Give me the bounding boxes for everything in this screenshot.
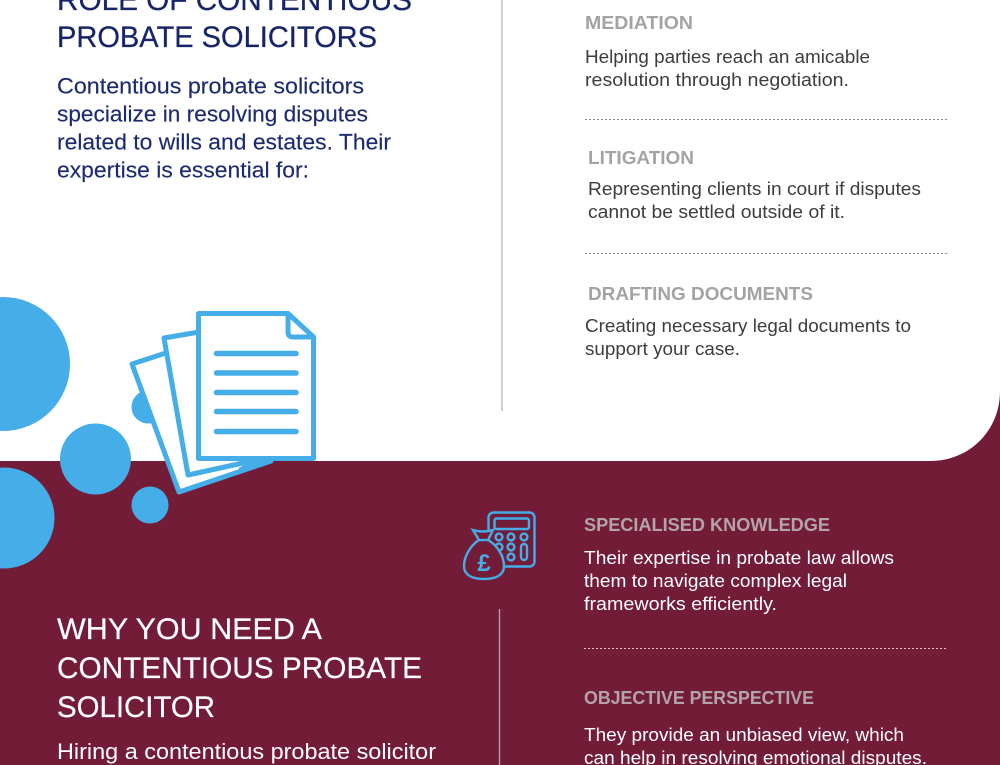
text block: role introduction: related to wills and estates. Their bbox=[57, 130, 392, 154]
heading: why you need a contentious probate solicitor: CONTENTIOUS PROBATE bbox=[57, 652, 422, 685]
icon: calculator and money bag: £ bbox=[477, 550, 491, 577]
item: objective perspective: They provide an unbiased view, which bbox=[584, 724, 904, 745]
panel: white upper section bbox=[0, 0, 1000, 461]
heading: role of contentious probate solicitors: PROBATE SOLICITORS bbox=[57, 21, 377, 54]
icon: calculator and money bag bbox=[464, 512, 534, 579]
item: drafting documents: Creating necessary legal documents to bbox=[585, 315, 911, 336]
item: litigation: Representing clients in court if disputes bbox=[588, 178, 921, 199]
item: mediation bbox=[585, 12, 870, 90]
item: objective perspective bbox=[584, 687, 927, 765]
item: specialised knowledge: SPECIALISED KNOWLEDGE bbox=[584, 514, 830, 535]
item: litigation bbox=[588, 147, 921, 222]
item: drafting documents bbox=[585, 283, 911, 359]
text block: role introduction: expertise is essential for: bbox=[57, 158, 309, 182]
item: specialised knowledge: Their expertise in probate law allows bbox=[584, 547, 894, 568]
text block: role introduction: Contentious probate solicitors bbox=[57, 74, 364, 98]
text block: why introduction: Hiring a contentious probate solicitor bbox=[57, 739, 437, 764]
item: mediation: Helping parties reach an amicable bbox=[585, 46, 870, 67]
item: litigation: LITIGATION bbox=[588, 147, 694, 168]
decorative blue circles bbox=[0, 297, 168, 568]
item: specialised knowledge: frameworks efficiently. bbox=[584, 593, 777, 614]
item: drafting documents: DRAFTING DOCUMENTS bbox=[588, 283, 813, 304]
heading: why you need a contentious probate solicitor: SOLICITOR bbox=[57, 691, 215, 724]
item: mediation: resolution through negotiation. bbox=[585, 69, 849, 90]
heading: why you need a contentious probate solicitor bbox=[57, 613, 422, 724]
text block: role introduction bbox=[57, 74, 392, 182]
item: specialised knowledge: them to navigate complex legal bbox=[584, 570, 847, 591]
item: objective perspective: OBJECTIVE PERSPECTIVE bbox=[584, 687, 814, 708]
text block: role introduction: specialize in resolving disputes bbox=[57, 102, 368, 126]
heading: why you need a contentious probate solicitor: WHY YOU NEED A bbox=[57, 613, 322, 646]
item: specialised knowledge bbox=[584, 514, 894, 614]
heading: role of contentious probate solicitors bbox=[57, 0, 412, 54]
item: litigation: cannot be settled outside of it. bbox=[588, 201, 845, 222]
item: mediation: MEDIATION bbox=[585, 12, 693, 33]
icon: stack of documents bbox=[132, 314, 314, 492]
item: drafting documents: support your case. bbox=[585, 338, 740, 359]
